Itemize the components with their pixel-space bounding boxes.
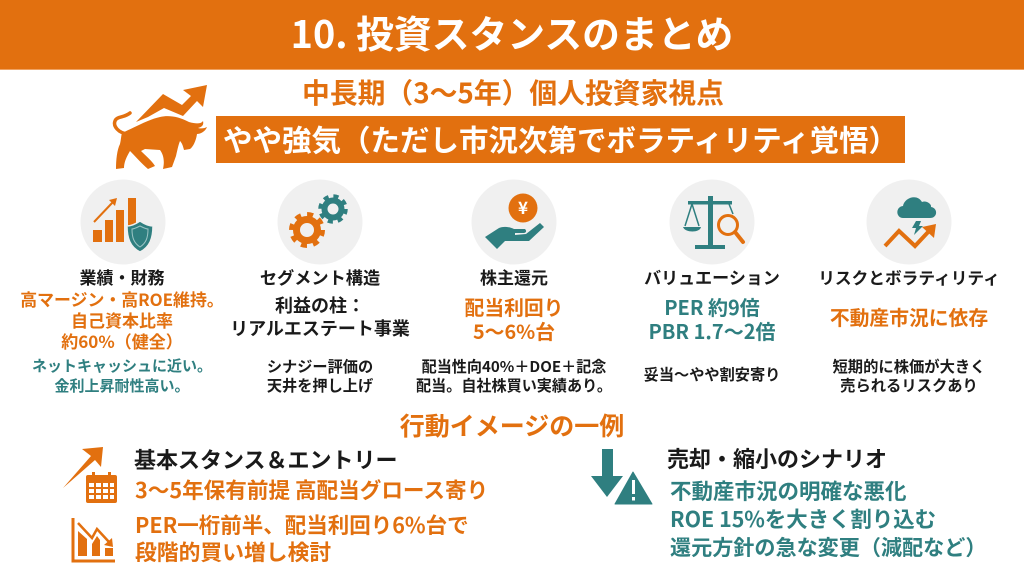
exit triggers: 還元方針の急な変更（減配など）: [670, 532, 986, 562]
panel: セグメント構造: [230, 180, 410, 396]
key message: 不動産市況に依存: [830, 302, 988, 331]
key message: [230, 292, 410, 341]
icon: hand and yen coin: ¥: [518, 194, 528, 219]
holding stance: 3〜5年保有前提 高配当グロース寄り: [135, 474, 488, 505]
icon: falling chart: [72, 518, 115, 562]
panel: バリュエーション: [644, 180, 780, 385]
title banner: [0, 0, 1024, 70]
key message: 利益の柱：: [275, 292, 365, 318]
key figures: 配当利回り: [465, 292, 563, 321]
key figures: [465, 292, 563, 345]
note: 短期的に株価が大きく: [832, 355, 985, 377]
icon: scale and magnifier: [670, 180, 754, 264]
key message: リアルエステート事業: [230, 315, 410, 341]
note: [267, 355, 373, 396]
key figures: [20, 286, 224, 353]
heading: 株主還元: [480, 264, 548, 289]
heading: バリュエーション: [644, 264, 780, 289]
note: 配当。自社株買い実績あり。: [416, 374, 612, 396]
exit triggers: [670, 475, 986, 562]
note: シナジー評価の: [267, 355, 373, 377]
heading: 基本スタンス＆エントリー: [134, 443, 398, 475]
note: [32, 355, 212, 396]
icon: arrow and calendar: [63, 447, 117, 503]
icon: gears: [278, 180, 362, 264]
section heading: 行動イメージの一例: [400, 407, 624, 443]
note: [416, 355, 612, 396]
exit triggers: 不動産市況の明確な悪化: [670, 475, 907, 506]
panel: 売却・縮小のシナリオ: [591, 442, 986, 562]
heading: 業績・財務: [80, 264, 164, 289]
exit triggers: ROE 15%を大きく割り込む: [670, 503, 936, 534]
title banner: 10. 投資スタンスのまとめ: [291, 4, 733, 59]
note: [832, 355, 985, 396]
key figures: PER 約9倍: [664, 292, 760, 321]
panel: リスクとボラティリティ: [818, 180, 1000, 396]
note: ネットキャッシュに近い。: [32, 355, 212, 376]
note: 金利上昇耐性高い。: [54, 375, 190, 396]
stance banner: やや強気（ただし市況次第でボラティリティ覚悟）: [223, 118, 898, 160]
icon: bull with rising arrow: [112, 85, 207, 169]
note: 配当性向40%＋DOE＋記念: [422, 355, 606, 377]
key figures: 約60%（健全）: [61, 328, 183, 353]
heading: 売却・縮小のシナリオ: [667, 442, 887, 474]
key figures: 自己資本比率: [71, 307, 173, 332]
subheading: 中長期（3〜5年）個人投資家視点: [302, 72, 724, 112]
panel: 業績・財務: [20, 180, 224, 396]
heading: リスクとボラティリティ: [818, 265, 1000, 289]
key figures: [648, 292, 776, 345]
icon: storm cloud and zigzag arrow: [866, 180, 952, 264]
key figures: PBR 1.7〜2倍: [648, 316, 776, 345]
heading: セグメント構造: [260, 264, 380, 289]
icon: hand and yen coin: [472, 180, 556, 264]
note: 天井を押し上げ: [267, 374, 373, 396]
note: 妥当〜やや割安寄り: [644, 363, 780, 385]
entry condition: [135, 509, 469, 567]
key figures: 高マージン・高ROE維持。: [20, 286, 224, 311]
key figures: 5〜6%台: [473, 316, 555, 345]
icon: down arrow and warning: [591, 449, 652, 504]
panel: 基本スタンス＆エントリー: [63, 443, 488, 567]
entry condition: PER一桁前半、配当利回り6%台で: [135, 509, 469, 540]
icon: bars and shield: [80, 180, 166, 264]
entry condition: 段階的買い増し検討: [135, 536, 331, 567]
note: 売られるリスクあり: [840, 374, 978, 396]
panel: 株主還元: [416, 180, 612, 396]
